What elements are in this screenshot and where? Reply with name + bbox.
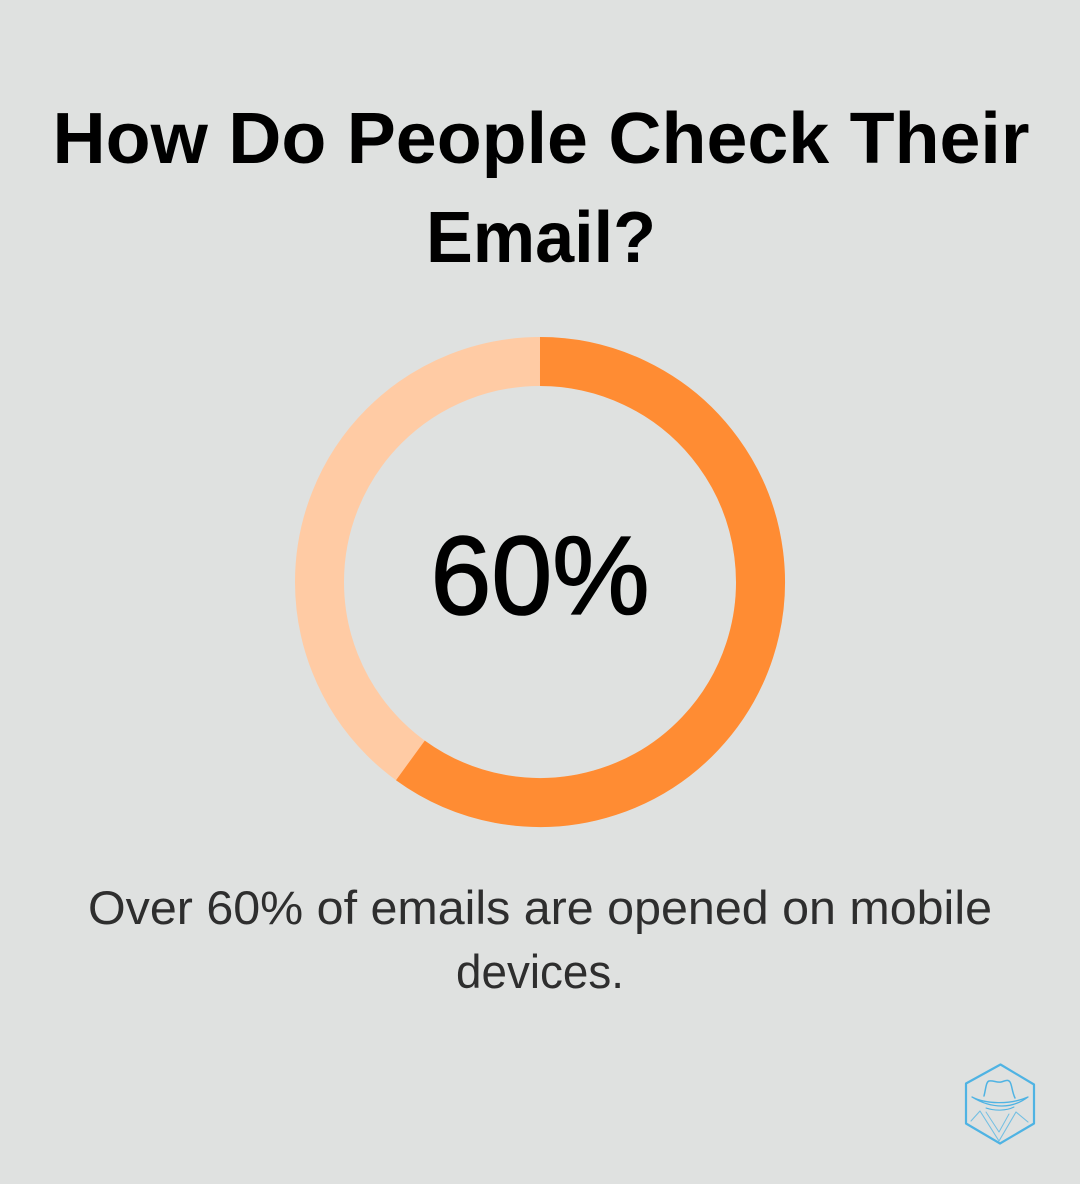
- description text: [88, 881, 992, 998]
- donut 60% segment: [410, 362, 760, 802]
- icon: logo, hexagon with hat and coat: [966, 1064, 1034, 1144]
- donut chart: 60%: [320, 362, 760, 802]
- title: How Do People Check Their: [52, 99, 1030, 179]
- description text: devices.: [456, 945, 624, 998]
- title: Email?: [426, 198, 656, 278]
- donut remainder segment: [320, 362, 760, 802]
- description text: Over 60% of emails are opened on mobile: [88, 881, 992, 934]
- title: [52, 99, 1030, 278]
- center value: 60%: [430, 514, 650, 638]
